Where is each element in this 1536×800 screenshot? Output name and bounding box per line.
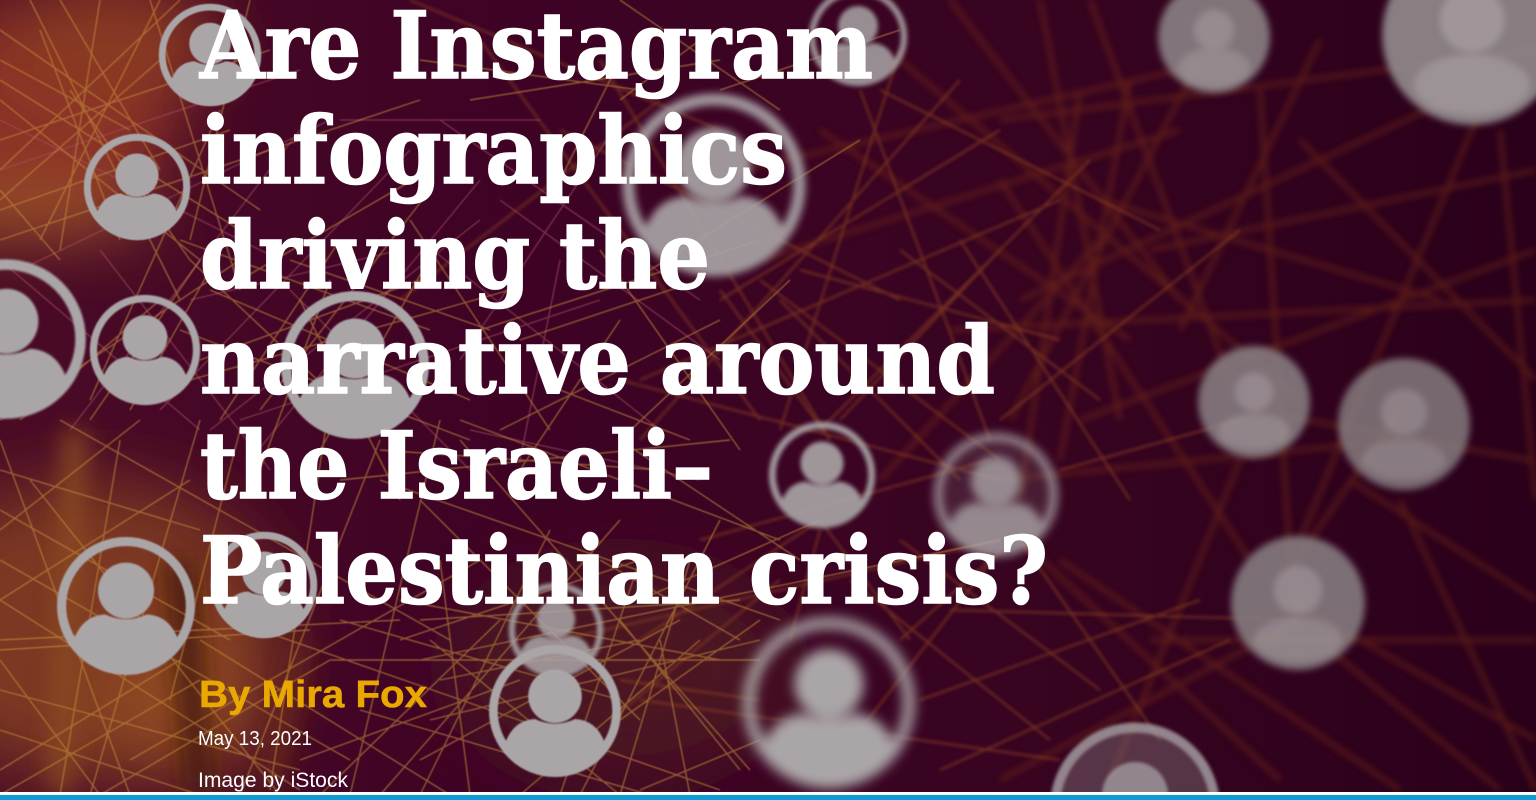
icon: user, lower-left large (62, 542, 190, 670)
title: infographics (200, 96, 787, 205)
network lines: distant (740, 0, 1536, 790)
icon: user, behind infographics (628, 99, 800, 271)
title: driving the (200, 201, 710, 310)
icon: user, lower-left behind title (214, 535, 314, 635)
icon: user, centre (772, 425, 872, 525)
icon: user, bottom edge (1056, 728, 1214, 795)
byline: By Mira Fox (199, 674, 427, 716)
icon: user, centre behind title (286, 296, 424, 434)
network lines: foreground pink (0, 70, 720, 480)
network lines: foreground gold (0, 0, 1000, 795)
bottom rule (0, 792, 1536, 800)
icon: blurred user, top right (1158, 0, 1270, 93)
title: Palestinian crisis? (200, 516, 1048, 625)
icon: user, left upper (87, 137, 187, 237)
icon: blurred user, right lower (1231, 536, 1365, 670)
icon: user, left middle (93, 298, 197, 402)
date: May 13, 2021 (198, 728, 312, 750)
title (199, 0, 1048, 625)
icon: blurred user, right middle right (1338, 358, 1470, 490)
icon: user, top behind title (162, 7, 258, 103)
icon: user, centre right (938, 437, 1054, 553)
icon: user, bottom large (749, 623, 909, 783)
icon: blurred user, top right corner (1382, 0, 1536, 125)
icon: blurred user, right middle left (1198, 346, 1310, 458)
title: the Israeli– (200, 411, 713, 520)
icon: user, top behind Instagram (812, 0, 904, 83)
title: narrative around (200, 306, 995, 415)
image credit: Image by iStock (198, 769, 348, 792)
icon: user, far-left large (0, 264, 81, 414)
network lines: midground (400, 0, 1300, 770)
icon: user, bottom stack upper (512, 586, 600, 674)
icon: user, bottom stack lower (493, 649, 617, 773)
